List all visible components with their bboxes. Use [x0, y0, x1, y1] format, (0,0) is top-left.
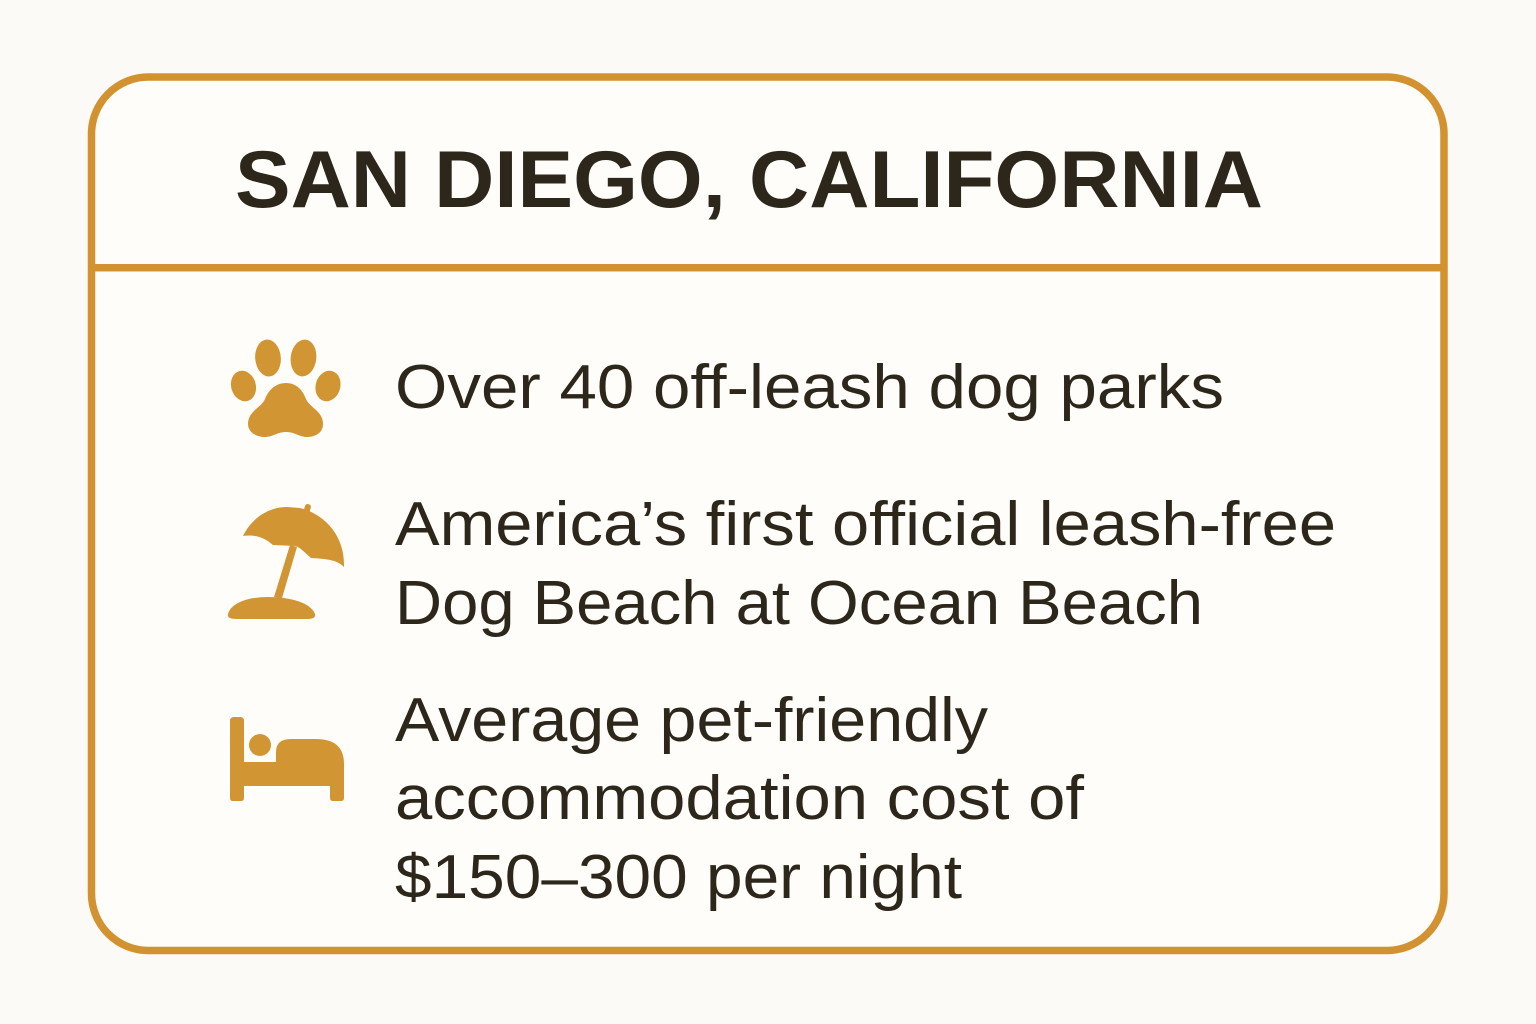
- text: dog parks: Over 40 off-leash dog parks: [395, 353, 1224, 422]
- text: accommodation cost: $150–300 per night: [395, 843, 962, 912]
- text: dog beach: Dog Beach at Ocean Beach: [395, 569, 1203, 638]
- icon: paw print: [227, 338, 344, 437]
- text: accommodation cost: accommodation cost of: [395, 764, 1085, 833]
- panel: card: [92, 77, 1444, 950]
- text: accommodation cost: Average pet-friendly: [395, 686, 988, 755]
- text: dog beach: [395, 490, 1336, 638]
- title: SAN DIEGO, CALIFORNIA: [235, 135, 1263, 225]
- text: accommodation cost: [395, 686, 1085, 912]
- icon: beach umbrella: [228, 503, 344, 619]
- icon: bed with person: [230, 717, 344, 801]
- text: dog beach: America’s first official leash-free: [395, 490, 1336, 559]
